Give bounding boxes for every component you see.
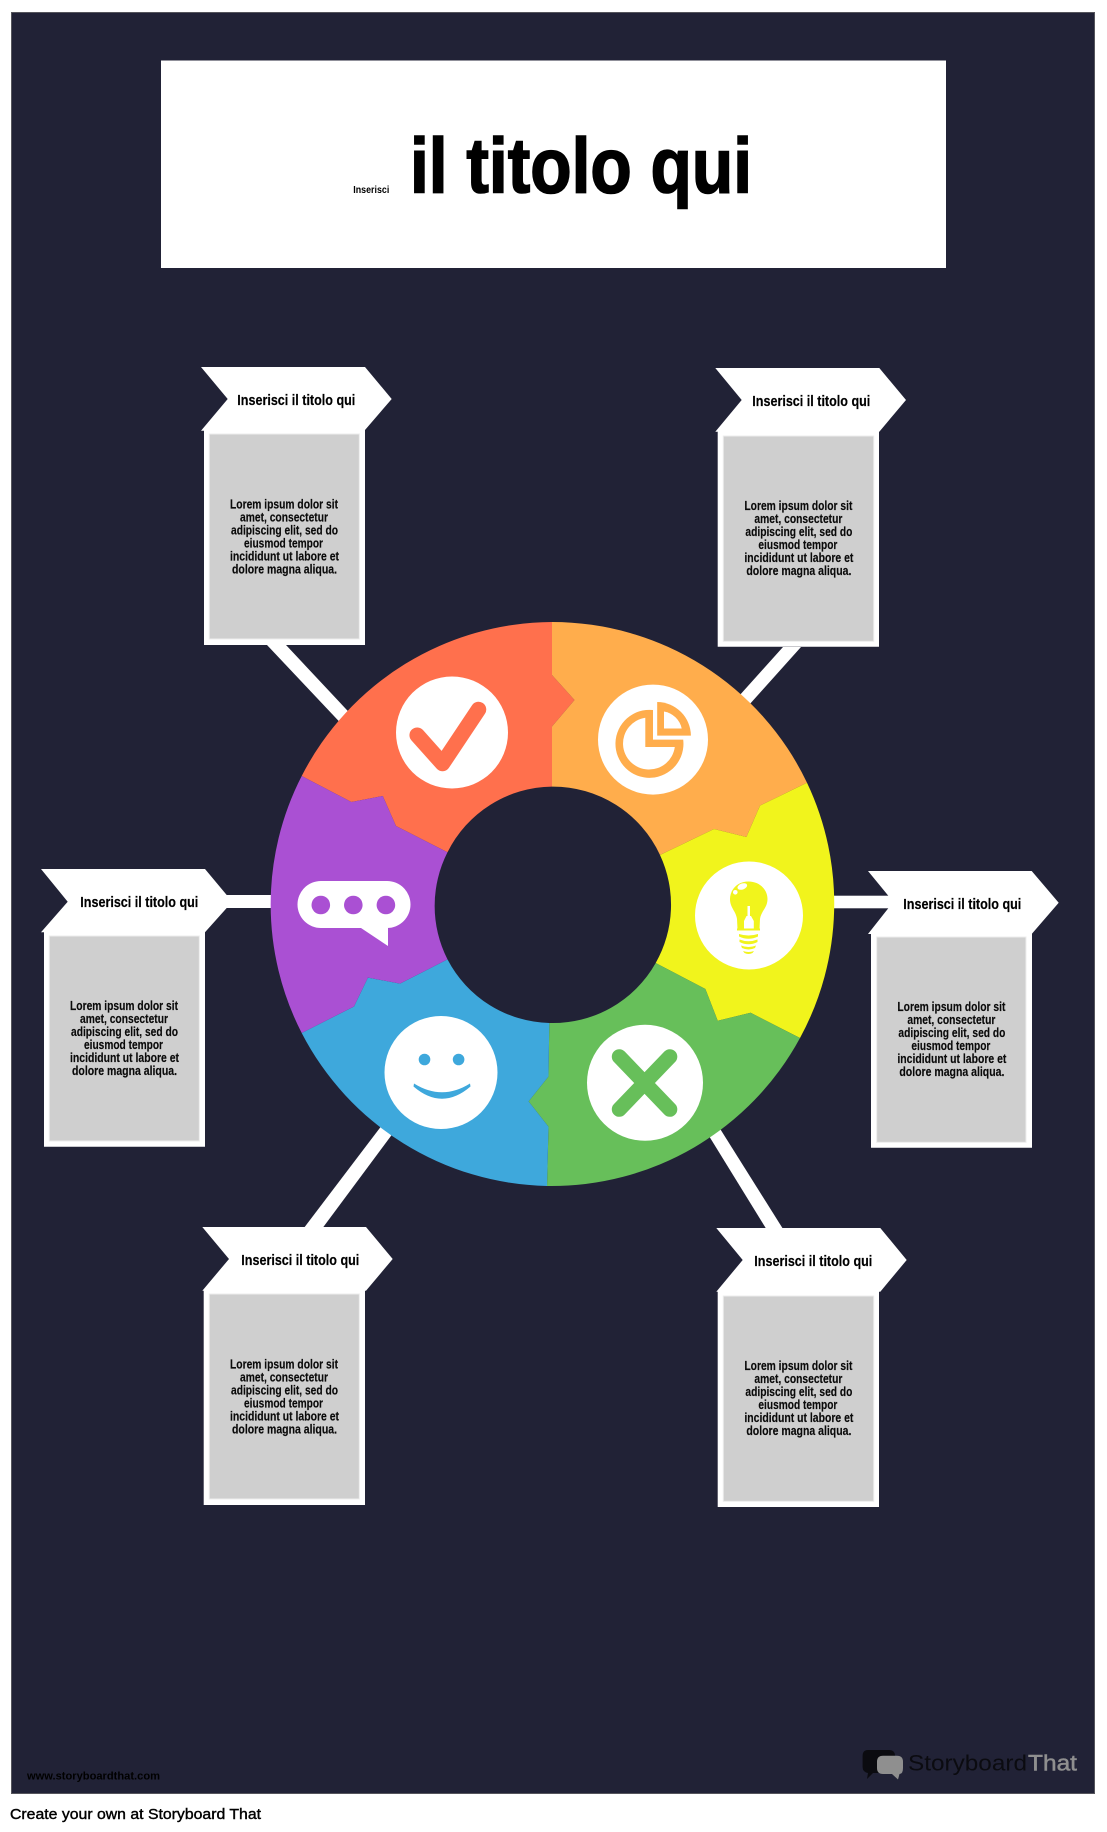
- callout: top left: [201, 367, 392, 645]
- callout: left: Lorem ipsum dolor sit: [70, 999, 179, 1013]
- ring wheel: [271, 622, 834, 1186]
- footer credit: Create your own at Storyboard That: [10, 1806, 262, 1823]
- callout: right: incididunt ut labore et: [897, 1052, 1007, 1066]
- callout: bottom right: adipiscing elit, sed do: [745, 1385, 853, 1399]
- segment: red: [302, 622, 574, 852]
- callout: top left: eiusmod tempor: [244, 536, 323, 550]
- segment: yellow: [656, 783, 834, 1038]
- callout: right: adipiscing elit, sed do: [898, 1026, 1006, 1040]
- title small word: Inserisci: [353, 185, 389, 196]
- callout: bottom left: eiusmod tempor: [244, 1396, 323, 1410]
- callout: bottom right: Inserisci il titolo qui: [754, 1253, 872, 1270]
- callout: bottom left: incididunt ut labore et: [230, 1410, 340, 1424]
- callout: left: dolore magna aliqua.: [72, 1064, 177, 1078]
- callout: bottom left: adipiscing elit, sed do: [231, 1384, 338, 1398]
- callout: left: incididunt ut labore et: [70, 1051, 180, 1065]
- callout: top left: Lorem ipsum dolor sit: [230, 498, 339, 512]
- callout: bottom left: [202, 1227, 393, 1505]
- callout: right: dolore magna aliqua.: [899, 1065, 1004, 1079]
- callout: top left: incididunt ut labore et: [230, 550, 340, 564]
- callout: top right: adipiscing elit, sed do: [745, 525, 853, 539]
- callout: bottom right: [716, 1228, 907, 1507]
- callout: top right: dolore magna aliqua.: [746, 564, 851, 578]
- callout: bottom left: Lorem ipsum dolor sit: [230, 1358, 339, 1372]
- segment: orange: [552, 622, 807, 855]
- callout: top right: [715, 368, 906, 647]
- callout: bottom right: eiusmod tempor: [758, 1398, 837, 1412]
- callout: bottom right: amet, consectetur: [754, 1372, 843, 1386]
- callout: left: adipiscing elit, sed do: [71, 1025, 178, 1039]
- icon: check mark: [396, 676, 508, 788]
- callout: top left: adipiscing elit, sed do: [231, 524, 338, 538]
- callout: top right: Inserisci il titolo qui: [752, 393, 870, 410]
- callout: right: Lorem ipsum dolor sit: [897, 1000, 1006, 1014]
- callout: bottom right: Lorem ipsum dolor sit: [744, 1359, 853, 1373]
- callout: right: eiusmod tempor: [911, 1039, 990, 1053]
- callout: top right: amet, consectetur: [754, 512, 843, 526]
- callout: right: amet, consectetur: [907, 1013, 996, 1027]
- callout: bottom right: dolore magna aliqua.: [746, 1424, 851, 1438]
- callout: bottom right: incididunt ut labore et: [744, 1411, 854, 1425]
- logo: Storyboard That: [863, 1750, 1077, 1780]
- callout: top left: Inserisci il titolo qui: [237, 392, 355, 409]
- callout: bottom left: Inserisci il titolo qui: [241, 1252, 359, 1269]
- callout: left: Inserisci il titolo qui: [80, 894, 198, 911]
- segment: blue: [302, 959, 549, 1186]
- callout: top left: amet, consectetur: [240, 510, 328, 524]
- icon: cross: [587, 1025, 703, 1141]
- website label: www.storyboardthat.com: [26, 1770, 160, 1782]
- icon: light bulb: [695, 862, 803, 970]
- callout: bottom left: dolore magna aliqua.: [232, 1422, 337, 1436]
- callout: left: eiusmod tempor: [84, 1038, 163, 1052]
- callout: left: [41, 869, 227, 1147]
- logo: Storyboard That: Storyboard: [908, 1751, 1027, 1776]
- callout: right: Inserisci il titolo qui: [903, 896, 1021, 913]
- callout: top right: eiusmod tempor: [758, 538, 837, 552]
- callout: top left: dolore magna aliqua.: [232, 562, 337, 576]
- logo: Storyboard That: That: [1028, 1751, 1077, 1776]
- callout: top right: Lorem ipsum dolor sit: [744, 499, 853, 513]
- callout: right: [868, 871, 1059, 1148]
- connector lines: [220, 645, 891, 1235]
- icon: pie chart: [598, 685, 708, 795]
- icon: speech bubble: [298, 881, 410, 946]
- title large words: il titolo qui: [410, 122, 752, 210]
- title panel: [161, 60, 946, 268]
- callout: bottom left: amet, consectetur: [240, 1370, 328, 1384]
- callout: top right: incididunt ut labore et: [744, 551, 854, 565]
- callout: left: amet, consectetur: [80, 1012, 168, 1026]
- icon: smiley: [384, 1016, 498, 1129]
- segment: green: [529, 963, 800, 1186]
- segment: purple: [271, 776, 448, 1033]
